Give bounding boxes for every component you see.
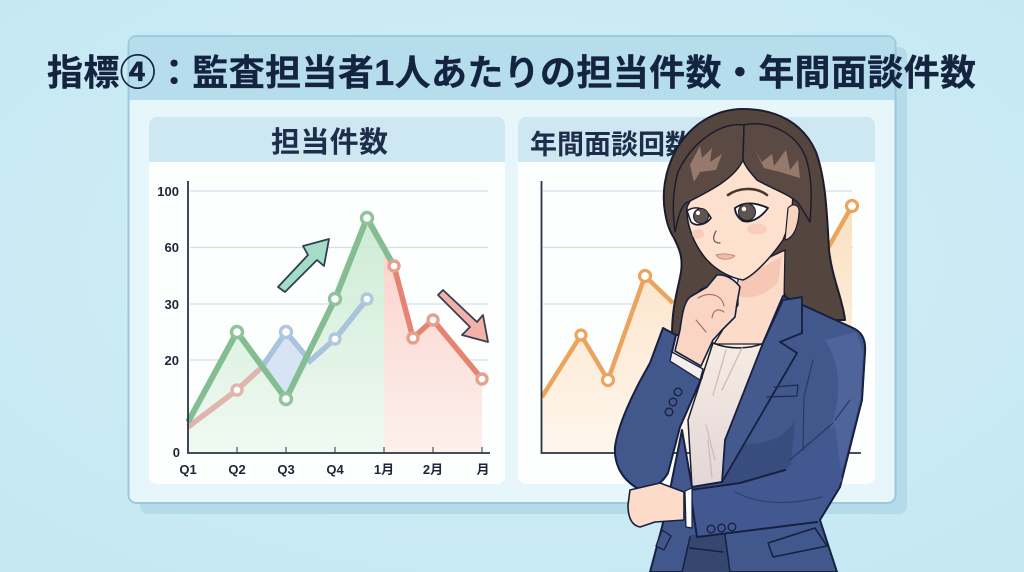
y axis labels: 60 (165, 240, 179, 255)
finger lines (696, 295, 724, 332)
raised hand (675, 275, 740, 366)
x axis labels: Q1 (179, 462, 197, 477)
data markers (232, 212, 487, 404)
arrow: up (278, 239, 329, 292)
jacket hem line (682, 535, 730, 572)
ear (785, 205, 799, 240)
x axis labels: Q4 (326, 462, 344, 477)
x axis labels: 月 (476, 462, 490, 477)
upper cuff (670, 352, 703, 380)
x axis labels: 1月 (374, 462, 394, 477)
chest pocket (767, 385, 798, 397)
eye: right (735, 203, 768, 221)
jacket shading (682, 332, 863, 572)
nose (714, 231, 720, 243)
title: 指標④：監査担当者1人あたりの担当件数・年間面談件数 (47, 52, 976, 93)
axes (542, 181, 861, 453)
orange line end (828, 206, 852, 248)
illustration: thinking woman (615, 109, 865, 572)
y axis labels: 30 (165, 297, 179, 312)
arm seam (790, 360, 850, 460)
back hair (664, 109, 845, 335)
x axis labels: Q2 (228, 462, 246, 477)
data markers (576, 200, 858, 386)
red line (394, 266, 482, 379)
front hair (673, 124, 811, 232)
axes (188, 181, 490, 453)
lower hand (628, 483, 684, 527)
panel: caseload chart (149, 117, 505, 484)
panel: annual interview chart (518, 117, 875, 484)
jacket body (650, 296, 865, 572)
lower cuff (685, 488, 692, 528)
x axis labels (179, 462, 490, 477)
jacket left arm (615, 328, 702, 489)
hair highlights (690, 146, 800, 182)
heading: caseload: 担当件数 (271, 126, 388, 159)
eyebrows (728, 189, 767, 195)
y axis labels: 20 (165, 353, 179, 368)
area fills (188, 218, 482, 453)
sleeve forearm (690, 425, 842, 537)
y axis labels: 0 (173, 445, 180, 460)
area fill (542, 206, 852, 453)
heading: interviews: 年間面談回数 (530, 130, 692, 160)
face (687, 148, 793, 280)
x axis labels: 2月 (423, 462, 443, 477)
arrow: down (438, 290, 488, 342)
neck shadow (738, 256, 782, 297)
x axis labels: Q3 (277, 462, 295, 477)
green line (188, 218, 394, 422)
y axis labels: 100 (157, 184, 179, 199)
panel: dashboard window (128, 36, 907, 514)
y axis labels (157, 184, 180, 460)
left pocket (656, 530, 671, 550)
cuff buttons (665, 388, 736, 533)
pink line (188, 367, 262, 427)
blouse folds (706, 348, 742, 478)
orange line (542, 276, 673, 397)
blush (692, 224, 767, 239)
eye: left (687, 208, 711, 225)
right pocket (768, 528, 827, 557)
blouse (688, 343, 764, 487)
blue line (262, 299, 367, 367)
mouth (716, 254, 735, 259)
neck (714, 250, 785, 344)
lapel (722, 297, 802, 482)
